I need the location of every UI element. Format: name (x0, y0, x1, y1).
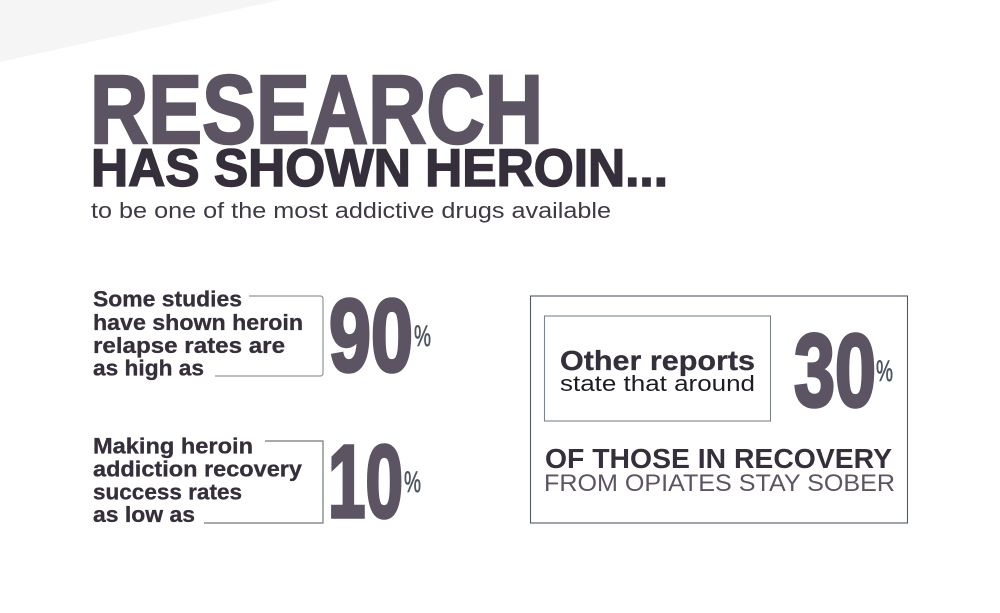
percent sign: 10: % (404, 466, 421, 499)
tagline: to be one of the most addictive drugs available (91, 198, 611, 223)
bracket: recovery rates (204, 441, 323, 523)
text block: relapse rates: relapse rates are (93, 333, 285, 358)
text block: relapse rates (93, 286, 303, 380)
subtitle: has shown heroin: HAS SHOWN HEROIN... (91, 139, 668, 198)
text block: recovery rates: success rates (93, 480, 242, 504)
number: 10: 10 (328, 424, 403, 539)
number: 30: 30 (794, 313, 876, 428)
panel: 10 percent recovery statistic (93, 424, 421, 539)
inner box: other reports (544, 316, 770, 421)
text block: relapse rates: as high as (93, 356, 204, 380)
percent sign: 30: % (876, 355, 893, 388)
text block: recovery rates (93, 434, 303, 527)
text block: recovery rates: Making heroin (93, 434, 253, 458)
text: of those in recovery: OF THOSE IN RECOVERY (545, 443, 892, 474)
heading block (90, 55, 668, 223)
inner box: other reports: Other reports (560, 345, 755, 376)
text block: relapse rates: have shown heroin (93, 310, 303, 335)
panel: 30 percent sober statistic (530, 296, 908, 523)
text block: recovery rates: addiction recovery (93, 456, 303, 482)
panel: 90 percent relapse statistic (93, 278, 431, 393)
inner box: other reports: state that around (560, 371, 755, 396)
text block: relapse rates: Some studies (93, 286, 242, 312)
text block: recovery rates: as low as (93, 502, 195, 527)
outer frame (530, 296, 908, 523)
number: 90: 90 (329, 278, 413, 393)
bracket: relapse rates (215, 296, 323, 376)
text: from opiates stay sober: FROM OPIATES STAY SOBER (544, 470, 895, 497)
percent sign: 90: % (414, 320, 431, 353)
title: research: RESEARCH (90, 55, 543, 164)
